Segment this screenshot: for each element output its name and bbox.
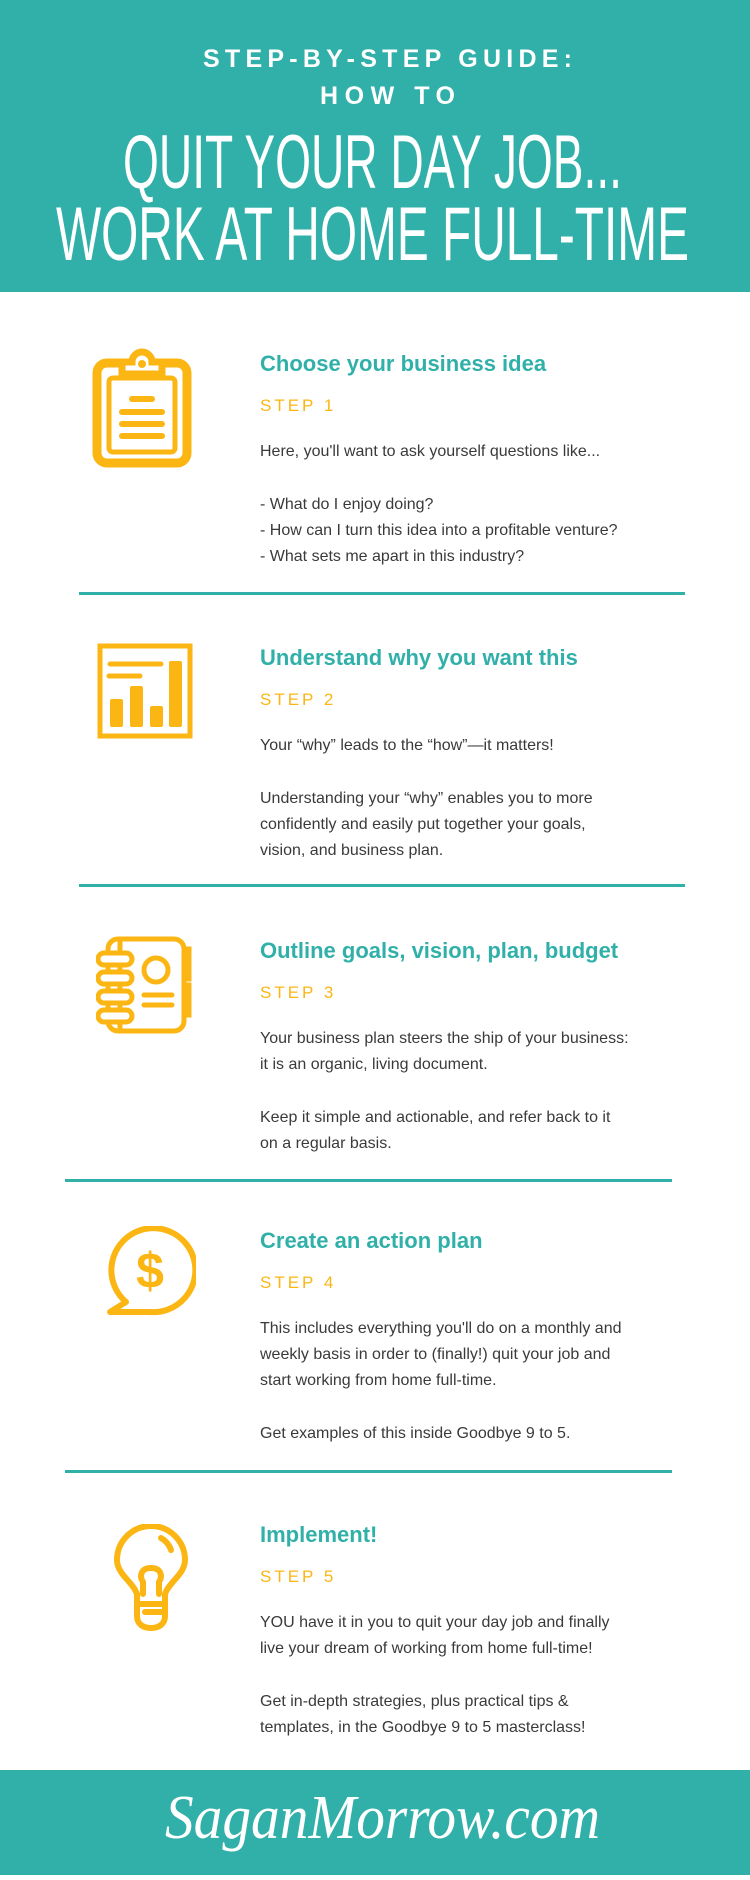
- subtitle: HOW TO: [320, 82, 455, 110]
- step 1 text: - What sets me apart in this industry?: [260, 548, 524, 565]
- step 1 text: - How can I turn this idea into a profitable venture?: [260, 522, 618, 539]
- step 1 text: Here, you'll want to ask yourself questions like...: [260, 443, 600, 460]
- step 5 text: YOU have it in you to quit your day job and finally: [260, 1614, 610, 1631]
- step 2 text: Understanding your “why” enables you to more: [260, 790, 593, 807]
- step 4 text: This includes everything you'll do on a monthly and: [260, 1320, 621, 1337]
- step 4 text: Get examples of this inside Goodbye 9 to 5.: [260, 1425, 570, 1442]
- step 1 text: Choose your business idea: [260, 351, 546, 376]
- icon: notebook: [96, 936, 192, 1034]
- subtitle: [203, 45, 572, 110]
- step 4 text: STEP 4: [260, 1273, 336, 1292]
- step 4 text: start working from home full-time.: [260, 1372, 497, 1389]
- icon: lightbulb: [114, 1524, 188, 1631]
- subtitle: STEP-BY-STEP GUIDE:: [203, 45, 572, 73]
- step 2 text: STEP 2: [260, 690, 336, 709]
- icon: clipboard: [92, 348, 192, 468]
- step 4 text: [260, 1228, 621, 1442]
- step 1 text: STEP 1: [260, 396, 336, 415]
- step 3 text: Your business plan steers the ship of your business:: [260, 1030, 629, 1047]
- step 5 text: templates, in the Goodbye 9 to 5 masterclass!: [260, 1719, 586, 1736]
- step 4 text: Create an action plan: [260, 1228, 483, 1253]
- step 2 text: Your “why” leads to the “how”—it matters!: [260, 737, 554, 754]
- step 2 text: Understand why you want this: [260, 645, 578, 670]
- step 3 text: Keep it simple and actionable, and refer back to it: [260, 1109, 610, 1126]
- step 3 text: it is an organic, living document.: [260, 1056, 488, 1073]
- step 2 text: [260, 645, 593, 859]
- step 3 text: Outline goals, vision, plan, budget: [260, 938, 618, 963]
- step 3 text: [260, 938, 629, 1152]
- header banner: [0, 0, 750, 292]
- main title: [56, 120, 689, 277]
- footer: site name: SaganMorrow.com: [165, 1784, 600, 1852]
- step 2 text: vision, and business plan.: [260, 842, 443, 859]
- icon: chart: [98, 644, 192, 738]
- step 5 text: Implement!: [260, 1522, 377, 1547]
- step 4 text: weekly basis in order to (finally!) quit your job and: [260, 1346, 610, 1363]
- step 2 text: confidently and easily put together your goals,: [260, 816, 586, 833]
- step 3 text: on a regular basis.: [260, 1135, 392, 1152]
- step 1 text: [260, 351, 618, 565]
- footer: [0, 1770, 750, 1875]
- icon: dollar speech bubble: $: [136, 1243, 164, 1299]
- step 5 text: live your dream of working from home full-time!: [260, 1640, 593, 1657]
- icon: dollar speech bubble: [107, 1226, 196, 1316]
- step 5 text: Get in-depth strategies, plus practical tips &: [260, 1693, 569, 1710]
- step 5 text: STEP 5: [260, 1567, 336, 1586]
- step 1 text: - What do I enjoy doing?: [260, 496, 433, 513]
- step 3 text: STEP 3: [260, 983, 336, 1002]
- step 5 text: [260, 1522, 610, 1736]
